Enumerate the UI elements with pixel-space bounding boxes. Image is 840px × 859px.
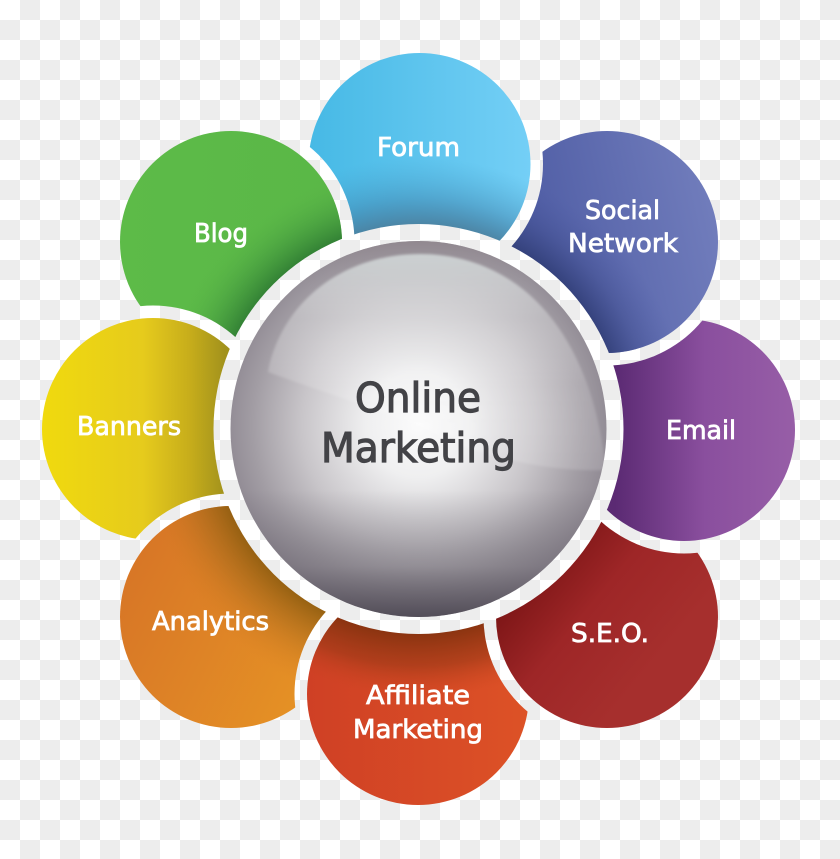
label: Analytics: Analytics	[152, 607, 269, 637]
petal shape: Forum	[310, 53, 530, 241]
petal shape: Banners	[42, 318, 230, 538]
petal: Analytics	[120, 506, 342, 728]
petal: Blog	[120, 131, 342, 353]
petal shape: Social Network	[496, 131, 718, 353]
petal: Banners	[42, 318, 230, 538]
title: Online: Online	[355, 374, 481, 422]
petal shape: S.E.O.	[496, 506, 718, 728]
petal shape: Affiliate Marketing	[307, 617, 528, 805]
petal: Email	[606, 320, 795, 541]
diagram: online marketing flower	[42, 53, 795, 805]
petal: S.E.O.	[496, 506, 718, 728]
petal: Affiliate Marketing	[307, 617, 528, 805]
label: Social: Social	[585, 196, 660, 226]
central sphere	[230, 241, 608, 619]
label: Marketing: Marketing	[353, 715, 483, 745]
petal: Social Network	[496, 131, 718, 353]
label: Network: Network	[568, 229, 678, 259]
petal shape: Blog	[120, 131, 342, 353]
label: Forum: Forum	[377, 133, 460, 163]
petal shape: Email	[606, 320, 795, 541]
petal shape: Analytics	[120, 506, 342, 728]
petal: Forum	[310, 53, 530, 241]
label: Banners: Banners	[77, 412, 181, 442]
label: Email: Email	[666, 416, 736, 446]
title: Marketing: Marketing	[321, 424, 516, 472]
label: Affiliate: Affiliate	[366, 681, 470, 711]
sphere body	[230, 241, 608, 619]
label: Blog: Blog	[194, 219, 248, 249]
label: S.E.O.: S.E.O.	[571, 619, 649, 649]
